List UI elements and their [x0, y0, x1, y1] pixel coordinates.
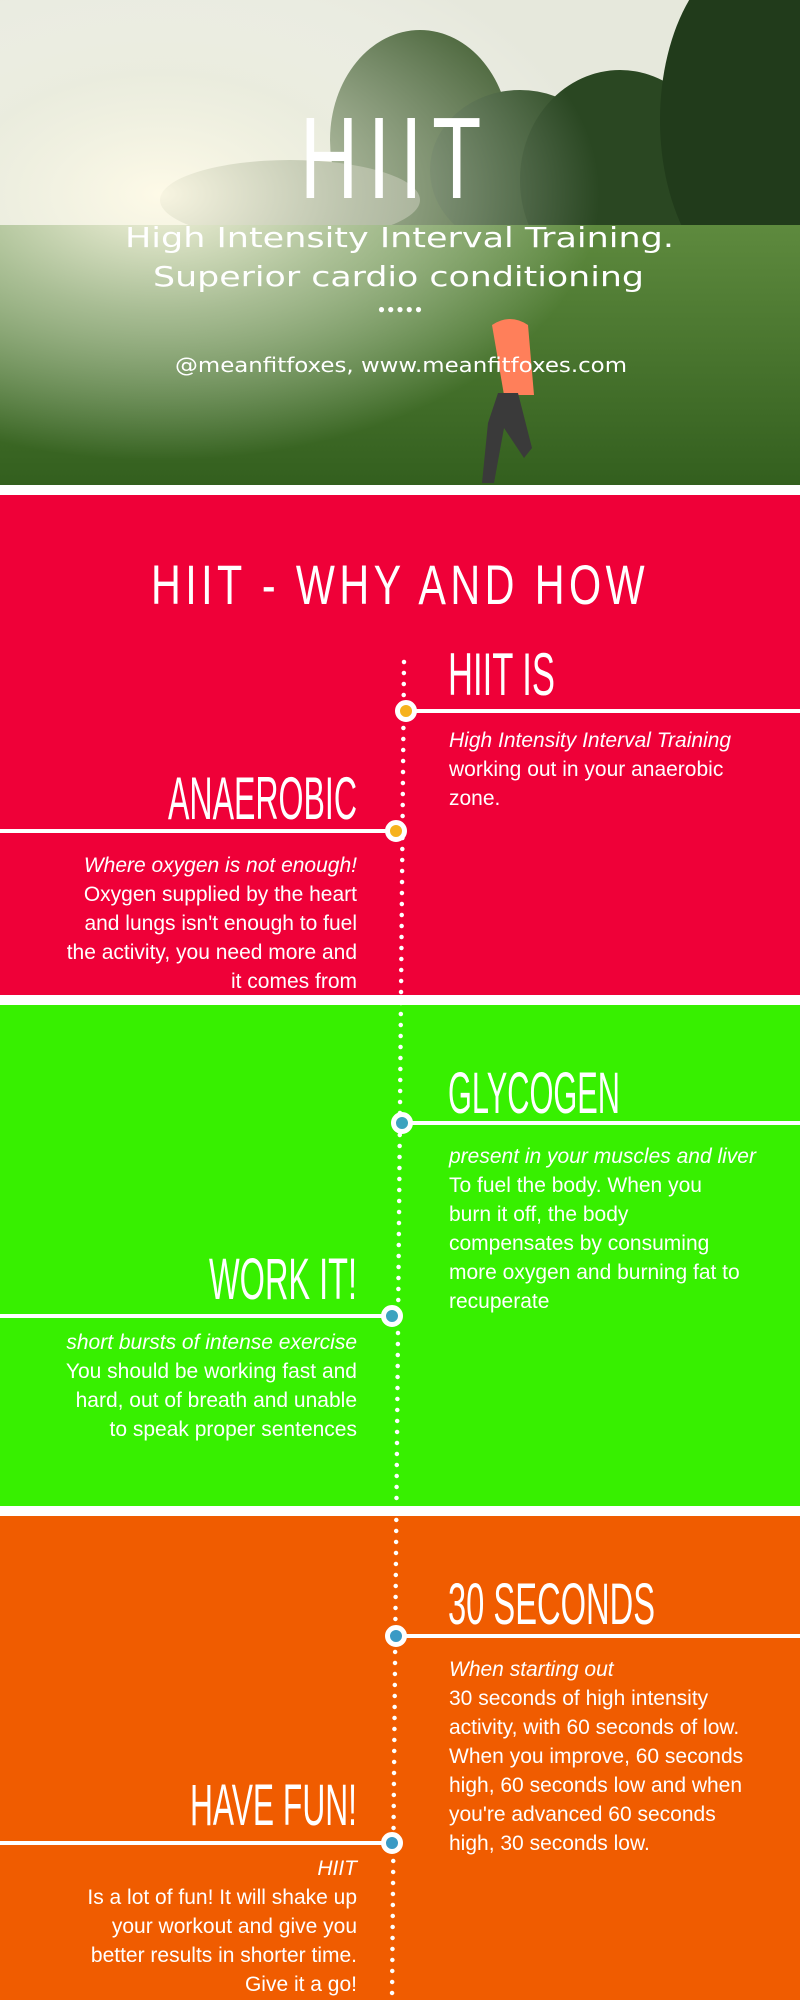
text: GLYCOGEN: To fuel the body. When you: [449, 1174, 702, 1197]
text: HAVE FUN!: Give it a go!: [245, 1973, 357, 1996]
hero subtitle: [125, 221, 674, 293]
connector line: HIIT IS: [406, 709, 800, 713]
text: GLYCOGEN: [448, 1145, 757, 1313]
connector line: WORK IT!: [0, 1314, 393, 1318]
text: GLYCOGEN: burn it off, the body: [449, 1203, 628, 1226]
node: GLYCOGEN: [391, 1112, 413, 1134]
text: ANAEROBIC: [67, 854, 357, 993]
panel: red section: [0, 495, 800, 995]
text: ANAEROBIC: Where oxygen is not enough!: [84, 854, 357, 877]
panel: green section: [0, 1005, 800, 1506]
text: 30 SECONDS: 30 seconds of high intensity: [449, 1687, 708, 1710]
hero photo panel: [0, 0, 800, 485]
text: ANAEROBIC: Oxygen supplied by the heart: [84, 883, 357, 906]
connector line: ANAEROBIC: [0, 829, 398, 833]
text: 30 SECONDS: activity, with 60 seconds of low.: [449, 1716, 739, 1739]
text: HAVE FUN!: better results in shorter time.: [91, 1944, 357, 1967]
text: GLYCOGEN: more oxygen and burning fat to: [449, 1261, 740, 1284]
text: WORK IT!: short bursts of intense exercise: [66, 1331, 357, 1354]
text: HAVE FUN!: Is a lot of fun! It will shake up: [87, 1886, 357, 1909]
text: 30 SECONDS: you're advanced 60 seconds: [449, 1803, 716, 1826]
text: WORK IT!: [66, 1331, 357, 1441]
panel: orange section: [0, 1516, 800, 2000]
text: HIIT IS: zone.: [449, 787, 500, 810]
text: WORK IT!: You should be working fast and: [66, 1360, 357, 1383]
text: ANAEROBIC: the activity, you need more and: [67, 941, 357, 964]
connector line: 30 SECONDS: [396, 1634, 800, 1638]
node: 30 SECONDS: [385, 1625, 407, 1647]
node: ANAEROBIC: [385, 820, 407, 842]
text: HIIT IS: High Intensity Interval Training: [449, 729, 731, 752]
node: HAVE FUN!: [381, 1832, 403, 1854]
text: 30 SECONDS: When starting out: [449, 1658, 614, 1681]
hero dots: ●●●●●: [378, 302, 424, 316]
text: GLYCOGEN: compensates by consuming: [449, 1232, 709, 1255]
hero handle: @meanfitfoxes, www.meanfitfoxes.com: [175, 353, 627, 377]
node: HIIT IS: [395, 700, 417, 722]
text: HIIT IS: [449, 729, 731, 810]
text: HAVE FUN!: your workout and give you: [112, 1915, 357, 1938]
connector line: HAVE FUN!: [0, 1841, 392, 1845]
text: HIIT IS: working out in your anaerobic: [449, 758, 723, 781]
text: 30 SECONDS: high, 60 seconds low and when: [449, 1774, 742, 1797]
text: WORK IT!: to speak proper sentences: [110, 1418, 357, 1441]
text: WORK IT!: hard, out of breath and unable: [76, 1389, 357, 1412]
connector line: GLYCOGEN: [402, 1121, 800, 1125]
hero title: HIIT: [300, 93, 491, 223]
text: HAVE FUN!: HIIT: [317, 1857, 357, 1880]
text: 30 SECONDS: [449, 1658, 743, 1855]
text: 30 SECONDS: high, 30 seconds low.: [449, 1832, 650, 1855]
text: ANAEROBIC: and lungs isn't enough to fuel: [84, 912, 357, 935]
text: ANAEROBIC: it comes from: [231, 970, 357, 993]
text: GLYCOGEN: present in your muscles and liver: [449, 1145, 756, 1168]
hero subtitle: Superior cardio conditioning: [153, 260, 644, 293]
hero subtitle: High Intensity Interval Training.: [125, 221, 674, 254]
text: HAVE FUN!: [87, 1857, 358, 1996]
text: GLYCOGEN: recuperate: [449, 1290, 549, 1313]
node: WORK IT!: [381, 1305, 403, 1327]
text: 30 SECONDS: When you improve, 60 seconds: [449, 1745, 743, 1768]
